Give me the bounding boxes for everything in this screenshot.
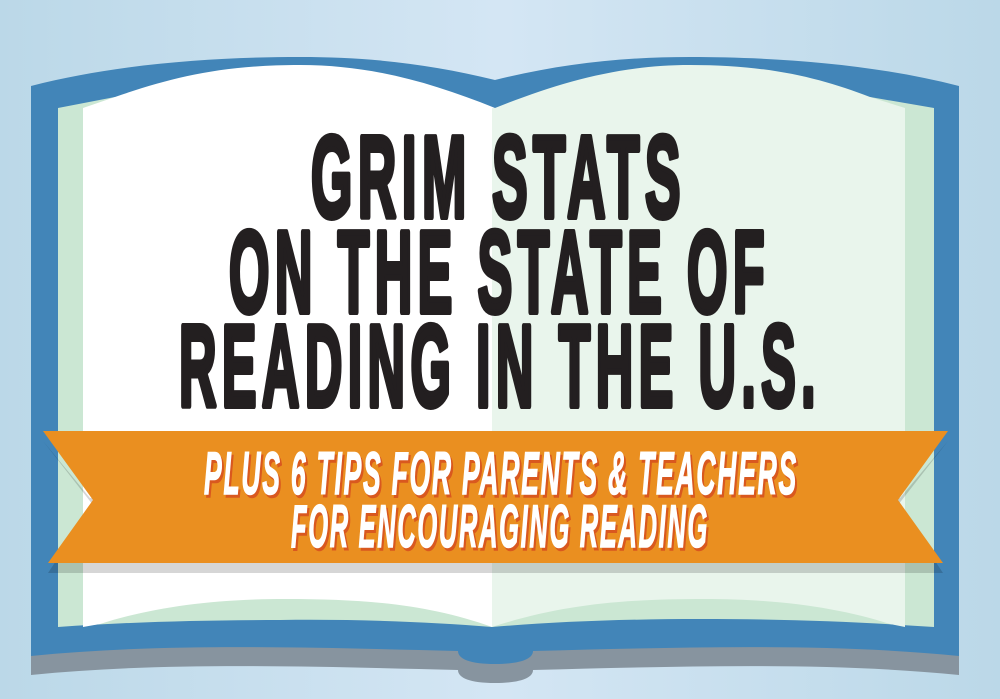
right page xyxy=(492,65,905,627)
ribbon shadow xyxy=(43,441,948,573)
subtitle xyxy=(204,440,798,560)
green page stack xyxy=(58,97,934,627)
subtitle shadow xyxy=(206,443,800,563)
left page xyxy=(83,65,495,627)
book cover shadow xyxy=(31,100,959,683)
orange ribbon banner xyxy=(43,431,948,563)
title xyxy=(179,112,821,431)
